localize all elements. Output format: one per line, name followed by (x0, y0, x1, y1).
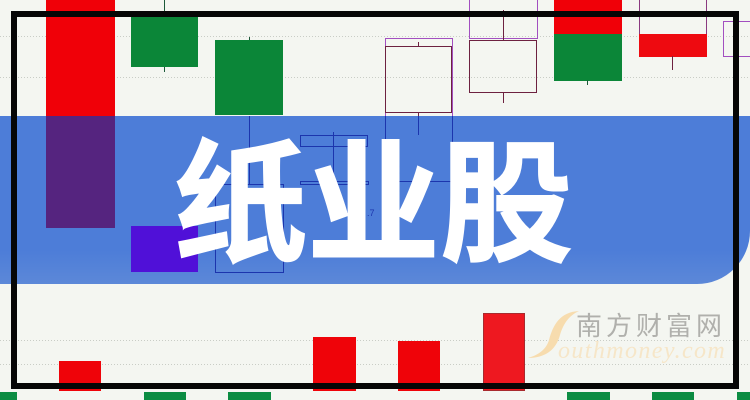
dark blue chart lines (216, 116, 452, 272)
blue title band (0, 116, 750, 284)
candle shadows inside band (46, 116, 452, 272)
upper candlesticks (46, 0, 750, 118)
green candle 2 (215, 37, 283, 115)
red candle (46, 0, 115, 117)
outlined candle 2 (470, 0, 538, 103)
watermark: southmoney logo (528, 311, 726, 364)
lower green volume bars (0, 392, 750, 400)
watermark chinese name: 南方财富网 (576, 311, 726, 341)
violet candle body (131, 226, 198, 272)
title: 纸业股 (174, 132, 573, 280)
watermark swoosh (528, 311, 579, 358)
outlined candle edge (724, 22, 750, 56)
purple candle body (46, 116, 115, 228)
outlined candle 1 (386, 38, 452, 118)
watermark url: outhmoney.com (558, 338, 726, 364)
outlined red candle (639, 0, 707, 70)
red and green candle (554, 0, 622, 85)
green candle 1 (131, 0, 198, 72)
lower red volume bars (59, 314, 524, 391)
small chart value: .7 (367, 208, 375, 218)
